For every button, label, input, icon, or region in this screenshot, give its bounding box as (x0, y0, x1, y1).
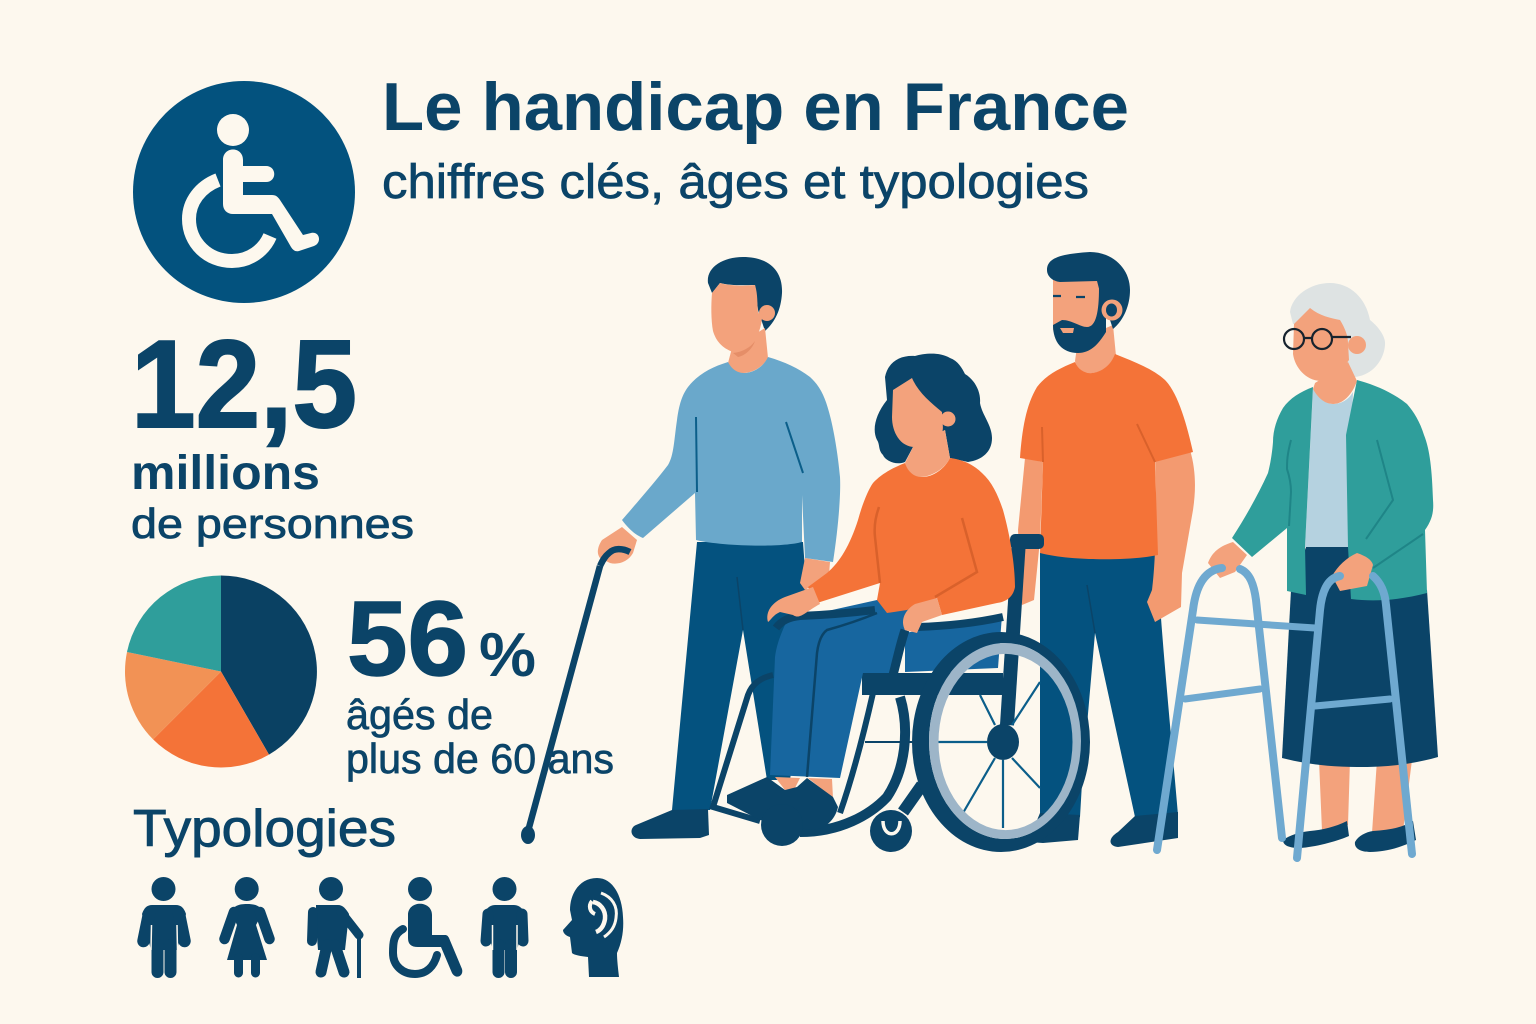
ear (759, 305, 775, 321)
hands (1208, 542, 1373, 591)
face (711, 283, 762, 352)
hand on cane (598, 527, 637, 564)
trousers (905, 615, 1002, 672)
stat: 56% âgés de plus de 60 ans (346, 580, 614, 782)
figure: woman seated in wheelchair (727, 354, 1015, 830)
hand on armrest (767, 587, 820, 622)
icon: man (142, 877, 186, 972)
subtitle: chiffres clés, âges et typologies (382, 156, 1089, 209)
cardigan (1232, 380, 1433, 600)
icon: wheelchair user (393, 877, 462, 977)
trousers (672, 542, 810, 810)
wheelchair wheels (761, 632, 1090, 852)
stat: 56% âgés de plus de 60 ans: % (479, 621, 536, 690)
ear (940, 412, 956, 426)
face (1293, 308, 1349, 381)
figure: elderly woman with walker (1157, 283, 1438, 858)
shoes (1283, 821, 1416, 852)
legs (1319, 760, 1412, 833)
icon: child (483, 877, 526, 972)
right hand (800, 558, 830, 590)
hand on lap (903, 598, 942, 633)
neck (1075, 325, 1116, 373)
icon: person with cane (312, 877, 359, 978)
hair (708, 257, 782, 331)
glasses (1284, 329, 1351, 349)
icon: wheelchair symbol in circle (133, 81, 355, 303)
mouth and eyes (1053, 296, 1085, 333)
skirt (1282, 547, 1438, 767)
stat: 12,5 millions de personnes (131, 316, 414, 547)
trousers (1040, 553, 1178, 817)
wheelchair back and frame (713, 534, 1044, 832)
stat: 12,5 millions de personnes: millions (131, 447, 320, 500)
neck (728, 328, 768, 373)
hair and beard (1047, 252, 1130, 353)
ankles (775, 777, 833, 798)
neck (905, 430, 950, 477)
shoes (1028, 812, 1178, 847)
hair (1290, 283, 1385, 377)
figure: bearded man in orange t-shirt (1018, 252, 1195, 847)
stat: 12,5 millions de personnes: 12,5 (131, 316, 357, 454)
shirt (1305, 389, 1353, 547)
icon: woman (224, 877, 270, 973)
figure: man in blue sweater (521, 257, 840, 844)
arm: left arm behind chair (1018, 458, 1043, 605)
armrests (776, 610, 1003, 628)
ear (1102, 300, 1122, 320)
stat: 56% âgés de plus de 60 ans: plus de 60 ans (346, 735, 614, 782)
sweater (808, 458, 1015, 615)
arm: right arm (1147, 450, 1195, 622)
face (892, 378, 943, 447)
ear (1348, 336, 1366, 354)
face (1053, 278, 1106, 345)
t-shirt (1020, 354, 1193, 559)
stat: 12,5 millions de personnes: de personnes (131, 500, 414, 547)
title: Le handicap en France (382, 69, 1129, 145)
illustration: group of four people (521, 252, 1438, 858)
cane (521, 566, 600, 844)
typology icons row (142, 877, 623, 978)
heading: Typologies: Typologies (133, 800, 396, 858)
walker (1157, 568, 1412, 858)
shoes (727, 777, 838, 830)
sweater (622, 357, 840, 562)
stat: 56% âgés de plus de 60 ans: âgés de (346, 691, 493, 738)
hair (875, 354, 992, 463)
stat: 56% âgés de plus de 60 ans: 56 (347, 580, 468, 698)
neck (1313, 362, 1357, 404)
pie chart (125, 576, 317, 767)
icon: head with ear (563, 878, 623, 977)
shoe (631, 809, 709, 839)
